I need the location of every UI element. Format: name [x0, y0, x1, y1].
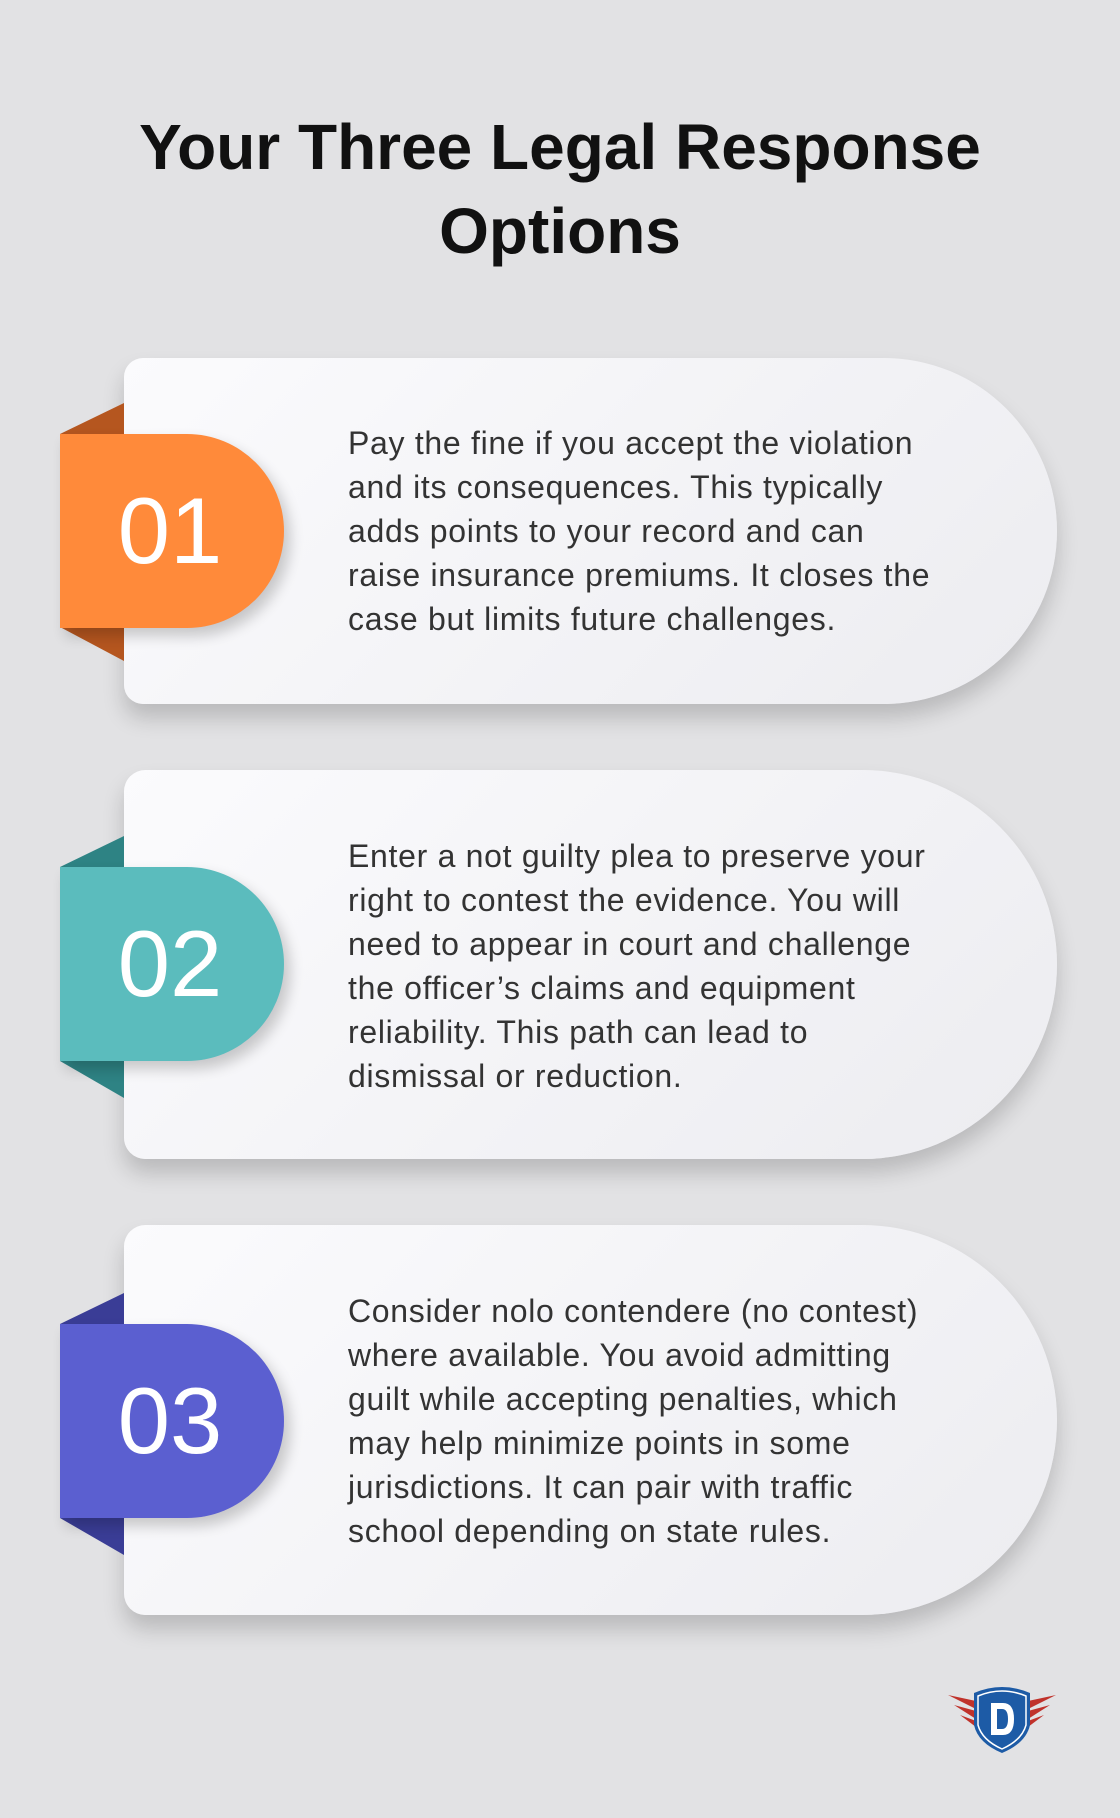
text 3: guilt while accepting penalties, which	[348, 1381, 898, 1417]
text 3: school depending on state rules.	[348, 1513, 831, 1549]
text 3: where available. You avoid admitting	[348, 1337, 891, 1373]
title	[139, 111, 981, 267]
icon: logo shield	[948, 1687, 1056, 1753]
text 1: Pay the fine if you accept the violation	[348, 425, 913, 461]
badge 01: 01	[118, 478, 222, 583]
text 3	[347, 1293, 918, 1549]
text 1: case but limits future challenges.	[348, 601, 836, 637]
text 1	[348, 425, 930, 637]
text 3: jurisdictions. It can pair with traffic	[348, 1469, 853, 1505]
panel: option 3	[60, 1225, 1066, 1638]
badge 01	[60, 434, 284, 628]
text 2: reliability. This path can lead to	[348, 1014, 808, 1050]
badge 03	[60, 1324, 284, 1518]
panel: option 1	[60, 358, 1066, 727]
badge 03: 03	[118, 1368, 222, 1473]
text 3: may help minimize points in some	[348, 1425, 851, 1461]
text 2: Enter a not guilty plea to preserve your	[348, 838, 926, 874]
text 3: Consider nolo contendere (no contest)	[348, 1293, 918, 1329]
card 2	[124, 770, 1057, 1159]
title: Your Three Legal Response	[139, 111, 981, 183]
text 2	[348, 838, 926, 1094]
text 1: adds points to your record and can	[348, 513, 865, 549]
text 1: and its consequences. This typically	[348, 469, 883, 505]
badge 02	[60, 867, 284, 1061]
text 2: right to contest the evidence. You will	[348, 882, 900, 918]
text 2: dismissal or reduction.	[348, 1058, 682, 1094]
text 1: raise insurance premiums. It closes the	[348, 557, 930, 593]
text 2: the officer’s claims and equipment	[348, 970, 856, 1006]
card 1	[124, 358, 1057, 704]
panel: option 2	[60, 770, 1066, 1182]
fold 1	[60, 403, 124, 661]
fold 2	[60, 836, 124, 1098]
badge 02: 02	[118, 911, 222, 1016]
title: Options	[439, 195, 681, 267]
card 3	[124, 1225, 1057, 1615]
text 2: need to appear in court and challenge	[348, 926, 911, 962]
fold 3	[60, 1293, 124, 1555]
